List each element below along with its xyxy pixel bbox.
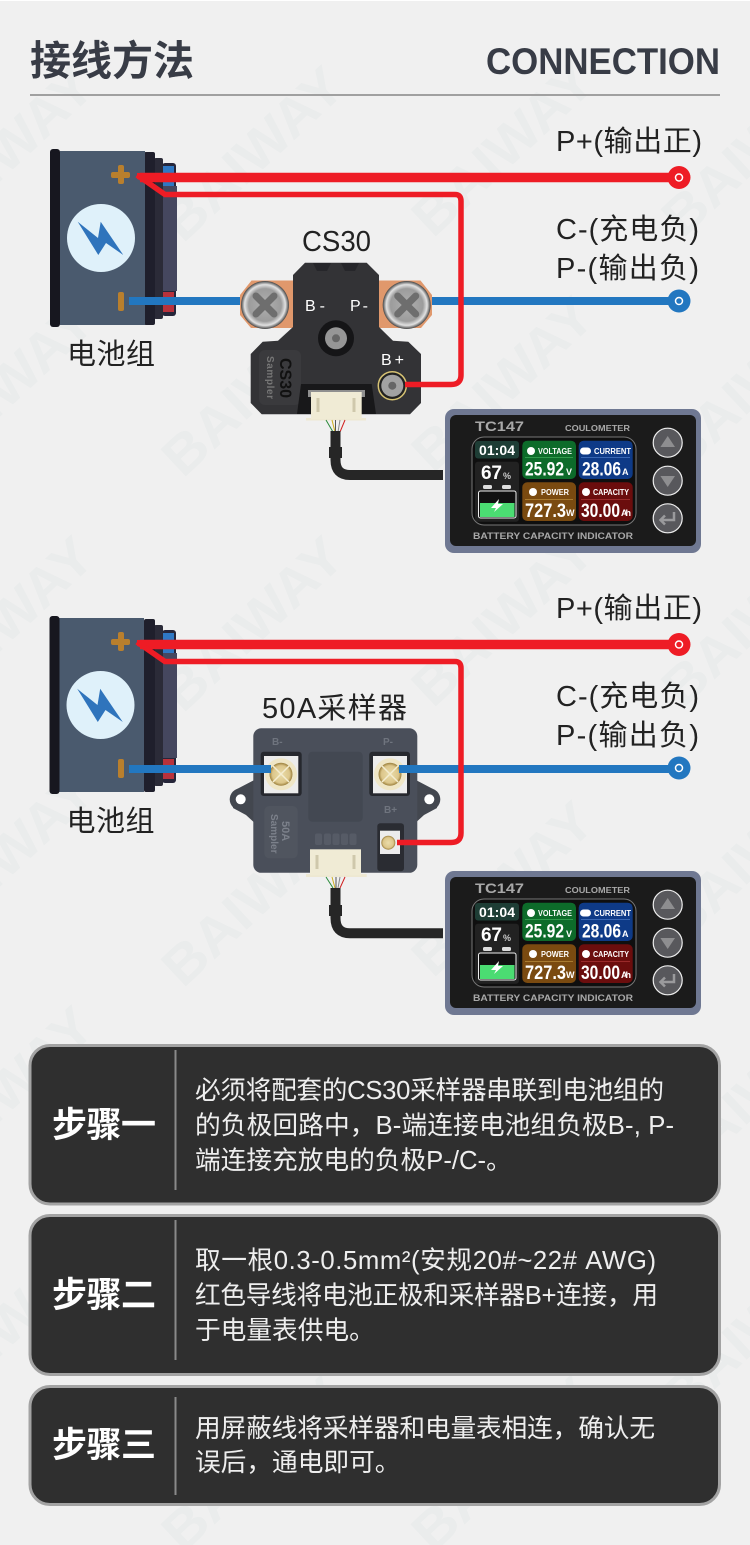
power cell: 727.3: [525, 501, 566, 522]
current cell: A: [622, 929, 629, 939]
step 3 text: [195, 1414, 655, 1477]
TC147 meter: COULOMETER: [565, 424, 630, 433]
battery cell: %: [503, 933, 511, 943]
model text: TC147: [475, 880, 524, 896]
current cell: CURRENT: [594, 447, 631, 456]
step 1 heading: 步骤一: [52, 1106, 156, 1145]
current cell: 28.06: [582, 460, 621, 480]
label P-: P-(输出负): [556, 719, 699, 752]
time cell: 01:04: [479, 904, 515, 920]
step 3 text: 用屏蔽线将采样器和电量表相连，确认无: [195, 1414, 655, 1443]
connector: [297, 384, 376, 432]
connector: [306, 849, 367, 888]
battery label: 电池组: [67, 338, 155, 371]
battery cell: [475, 462, 519, 522]
output terminal: P+: [668, 166, 690, 189]
header: [30, 38, 720, 96]
panel: step 1: [30, 1046, 720, 1204]
model print: Sampler: [268, 814, 279, 854]
power cell: [522, 482, 576, 522]
body print: [259, 350, 301, 405]
red positive wires: [137, 640, 670, 842]
label C-: C-(充电负): [556, 213, 699, 246]
battery pack: [50, 149, 177, 327]
voltage cell: V: [566, 929, 572, 939]
voltage cell: 25.92: [525, 460, 564, 480]
terminal labels: B-: [305, 298, 325, 315]
diagram 2: 50A wiring: [50, 592, 702, 1015]
screw right: [383, 281, 431, 329]
shielded cable: [336, 431, 443, 475]
panel: step 2: [30, 1216, 720, 1374]
step 3 text: 误后，通电即可。: [195, 1448, 400, 1477]
english title: CONNECTION: [486, 41, 720, 82]
battery cell: [475, 924, 519, 984]
step 2 text: 取一根0.3-0.5mm²(安规20#~22# AWG): [195, 1246, 656, 1275]
button up: [653, 890, 682, 919]
watermark pattern: BAIWAY: [400, 285, 606, 483]
power cell: W: [566, 508, 575, 518]
capacity cell: 30.00: [581, 501, 620, 522]
current cell: CURRENT: [594, 909, 631, 918]
battery cell: 67: [481, 925, 502, 946]
title: 接线方法: [30, 38, 194, 84]
voltage cell: [522, 903, 576, 942]
power cell: 727.3: [525, 963, 566, 984]
diagram 1: CS30 wiring: [50, 125, 702, 553]
step 1 text: 必须将配套的CS30采样器串联到电池组的: [195, 1076, 664, 1105]
50A sampler: [230, 728, 440, 888]
watermark pattern: BAIWAY: [150, 800, 356, 998]
watermark pattern: BAIWAY: [400, 790, 606, 988]
step 2 text: 于电量表供电。: [195, 1316, 375, 1345]
watermark pattern: BAIWAY: [150, 55, 356, 253]
capacity cell: CAPACITY: [593, 950, 630, 959]
blue negative wires: [129, 765, 670, 773]
watermark pattern: BAIWAY: [400, 50, 606, 248]
label C-: C-(充电负): [556, 680, 699, 713]
battery cell: %: [503, 471, 511, 481]
model print: [264, 806, 298, 858]
terminal marks: B-: [272, 737, 283, 748]
current cell: 28.06: [582, 922, 621, 942]
output terminal: P+: [668, 633, 690, 656]
TC147 meter: [445, 871, 701, 1015]
step 3 heading: 步骤三: [52, 1426, 156, 1465]
B+ screw: [378, 372, 406, 400]
button up: [653, 428, 682, 457]
mounting ears: [230, 778, 440, 826]
indicator caption: BATTERY CAPACITY INDICATOR: [473, 993, 634, 1003]
step 1 text: 的负极回路中，B-端连接电池组负极B-, P-: [195, 1111, 674, 1140]
output terminal: P- / C-: [668, 756, 690, 780]
B+ terminal: [377, 823, 404, 871]
watermark pattern: BAIWAY: [150, 290, 356, 488]
capacity cell: [579, 482, 633, 522]
device name 50A: 50A采样器: [262, 692, 407, 725]
right terminal: [369, 752, 410, 796]
battery label: 电池组: [66, 805, 154, 838]
time cell: 01:04: [479, 442, 515, 458]
model text: TC147: [475, 418, 524, 434]
current cell: A: [622, 467, 629, 477]
terminal labels: P-: [350, 298, 368, 315]
blue negative wires: [129, 297, 670, 305]
body print: Sampler: [264, 356, 275, 399]
body print: CS30: [276, 358, 295, 398]
terminal labels: B+: [381, 352, 404, 369]
button down: [653, 928, 682, 957]
device name CS30: CS30: [302, 226, 371, 258]
terminal marks: P-: [383, 737, 393, 748]
label P+: P+(输出正): [556, 592, 702, 625]
voltage cell: 25.92: [525, 922, 564, 942]
TC147 meter: [445, 409, 701, 553]
indicator caption: BATTERY CAPACITY INDICATOR: [473, 531, 634, 541]
battery cell: 67: [481, 463, 502, 484]
step 1 text: [195, 1076, 674, 1175]
label P+: P+(输出正): [556, 125, 702, 158]
voltage cell: VOLTAGE: [538, 447, 573, 456]
center screw: [318, 320, 354, 356]
CS30 sampler: [240, 263, 432, 432]
terminal marks: [272, 737, 397, 816]
step 2 text: [195, 1246, 658, 1345]
button enter: [653, 966, 682, 995]
battery pack: [50, 616, 177, 794]
voltage cell: [522, 441, 576, 480]
power cell: [522, 944, 576, 984]
current cell: [579, 903, 633, 942]
terminal labels: [305, 298, 404, 369]
capacity cell: Ah: [621, 970, 631, 980]
vents: [315, 834, 356, 845]
left terminal: [261, 752, 302, 796]
watermark pattern: BAIWAY: [150, 525, 356, 723]
step 2 text: 红色导线将电池正极和采样器B+连接，用: [195, 1281, 658, 1310]
panel: step 3: [30, 1386, 720, 1504]
shielded cable: [336, 888, 443, 933]
button down: [653, 466, 682, 495]
capacity cell: CAPACITY: [593, 488, 630, 497]
output terminal: P- / C-: [668, 290, 690, 312]
current cell: [579, 441, 633, 480]
capacity cell: Ah: [621, 508, 631, 518]
power cell: W: [566, 970, 575, 980]
TC147 meter: COULOMETER: [565, 886, 630, 895]
voltage cell: VOLTAGE: [538, 909, 573, 918]
power cell: POWER: [541, 950, 569, 959]
step 2 heading: 步骤二: [52, 1276, 156, 1315]
model print: 50A: [279, 821, 291, 841]
capacity cell: 30.00: [581, 963, 620, 984]
step 1 text: 端连接充放电的负极P-/C-。: [195, 1146, 512, 1175]
terminal marks: B+: [384, 805, 397, 816]
capacity cell: [579, 944, 633, 984]
button enter: [653, 504, 682, 533]
label P-: P-(输出负): [556, 252, 699, 285]
red positive wires: [137, 173, 670, 384]
voltage cell: V: [566, 467, 572, 477]
screw left: [241, 281, 289, 329]
power cell: POWER: [541, 488, 569, 497]
watermark pattern: BAIWAY: [400, 520, 606, 718]
